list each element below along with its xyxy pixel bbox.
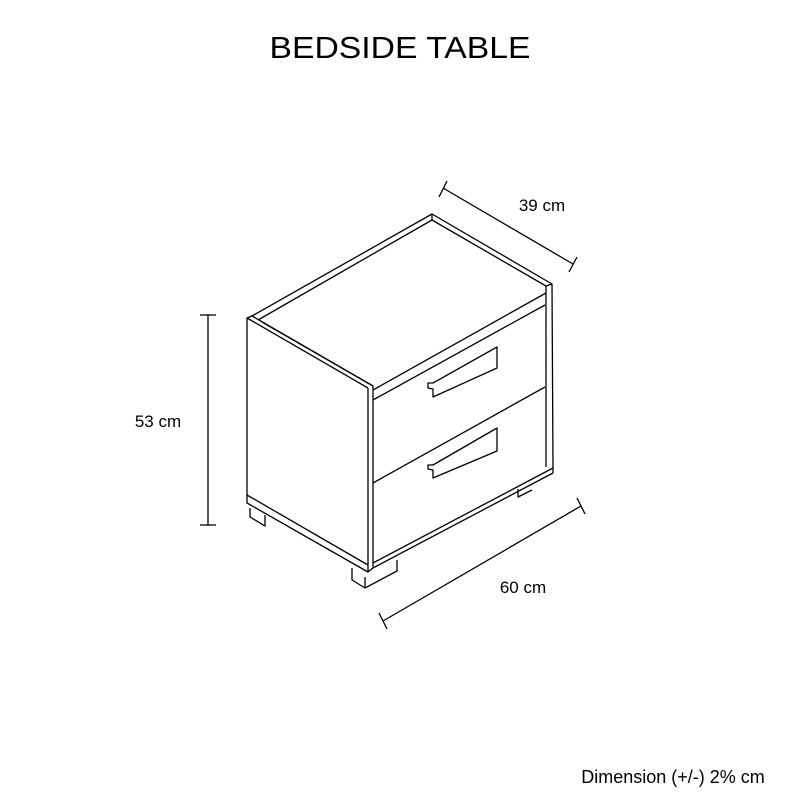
plinth [373, 468, 553, 563]
drawer 2 [373, 387, 545, 483]
dimension: height 53 cm [200, 315, 216, 525]
text: 53 cm [135, 412, 181, 431]
dimension: width 60 cm [379, 498, 585, 629]
footer note: Dimension (+/-) 2% cm [581, 767, 765, 787]
top back edge and right panel [252, 214, 553, 467]
text: 60 cm [500, 578, 546, 597]
dimension: depth 39 cm [439, 181, 577, 272]
drawer 1 [373, 305, 545, 400]
feet [250, 508, 265, 526]
bedside table drawing [247, 214, 553, 588]
left side panel [247, 316, 373, 572]
title: BEDSIDE TABLE [270, 30, 530, 65]
text: 39 cm [519, 196, 565, 215]
